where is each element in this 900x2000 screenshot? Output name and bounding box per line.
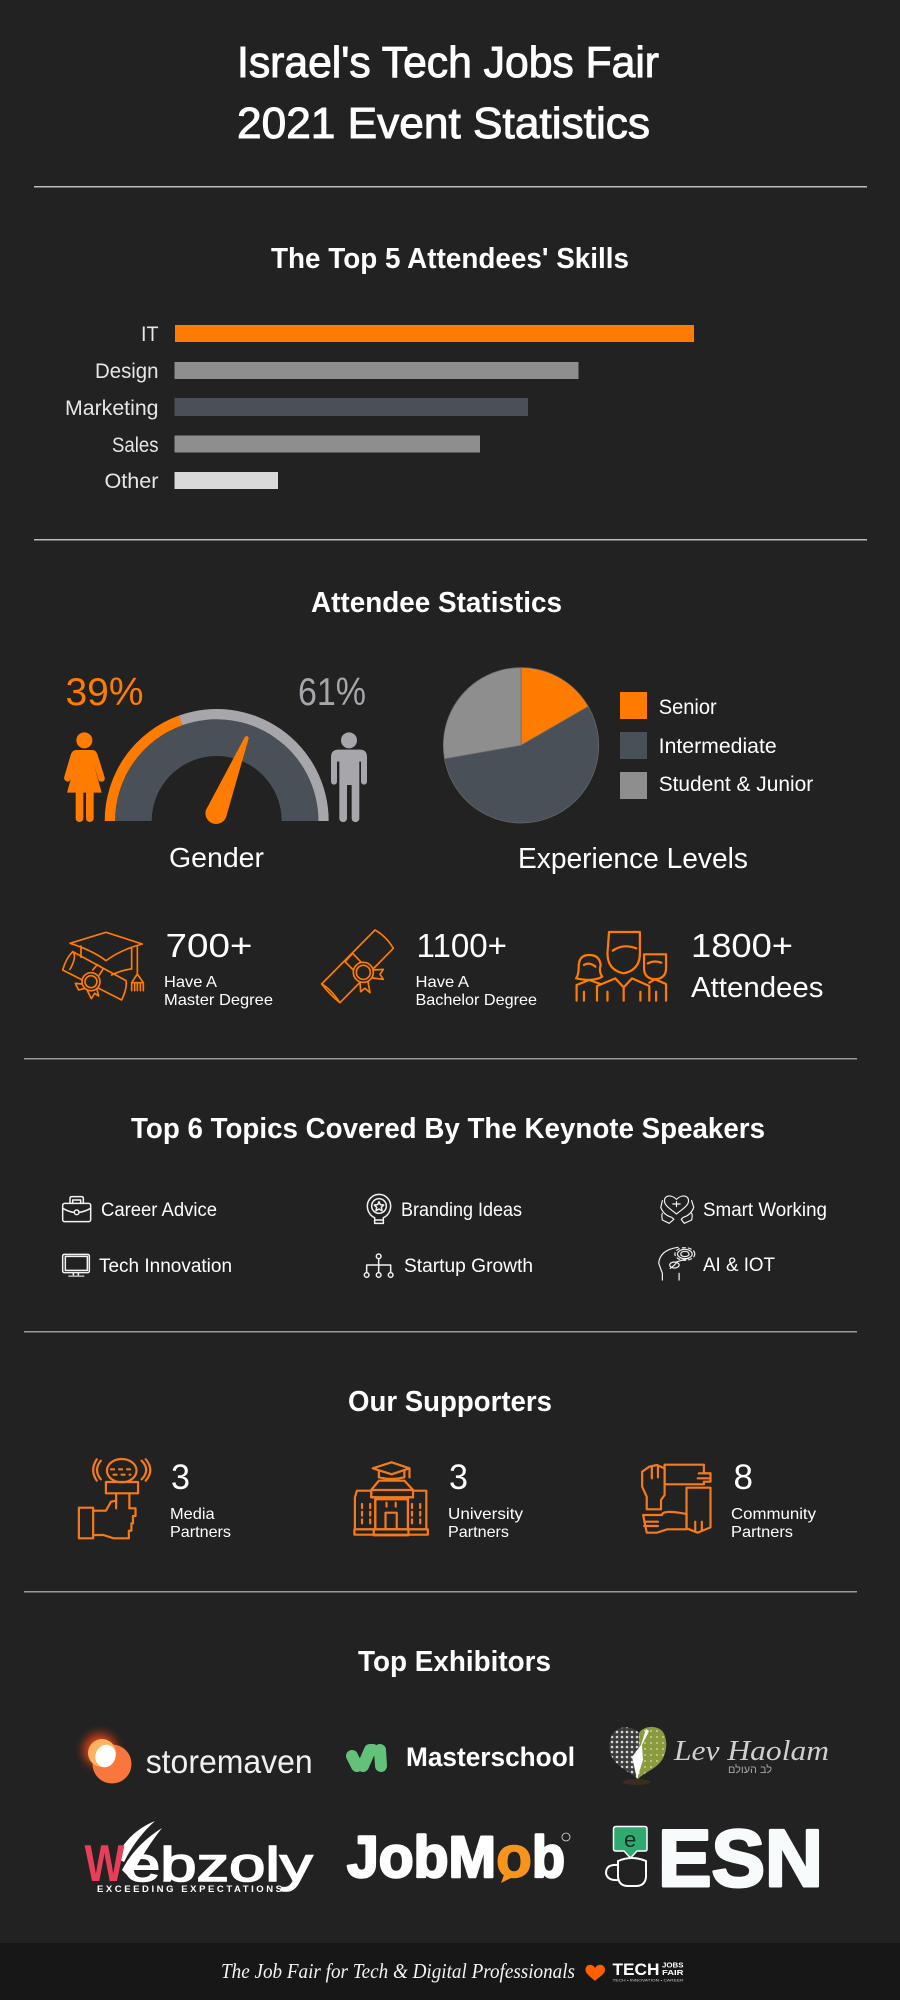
logo: tech jobs fair: JOBS [662,1960,684,1970]
supporter: university partners [354,1458,523,1541]
label: bachelor degree: Have A [416,974,469,991]
bar chart: skills: Other [104,470,158,493]
logo: esn: ESN [658,1814,823,1904]
value and label: university: 3 [449,1458,468,1497]
topic: career advice: Career Advice [101,1200,217,1221]
icon: diploma [322,930,393,1003]
value: 1100+: 1100+ [416,927,507,964]
logo: webzoly: ebzoly [124,1839,312,1892]
logo: lev haolam: לב העולם [728,1763,772,1776]
icon: monitor [63,1254,89,1277]
icon: hands holding heart [661,1196,694,1223]
topic: AI and IOT [659,1247,775,1280]
value and label: media [170,1458,231,1541]
bar chart: skills [65,323,694,493]
title [237,38,659,148]
gender label: Gender [169,842,264,873]
logo: webzoly: W [84,1835,125,1893]
heading: exhibitors: Top Exhibitors [358,1646,551,1678]
value and label: media: Media [170,1506,215,1523]
panel: supporters [79,1386,816,1541]
icon: heart [586,1965,605,1981]
bar chart: skills: Marketing [65,397,158,420]
stat: attendees [576,927,824,1004]
logo: masterschool: Masterschool [406,1742,575,1772]
icon: robot head with gear [659,1247,695,1280]
icon: university building [354,1462,428,1535]
gauge ring [105,709,329,821]
logo: storemaven: storemaven [146,1743,313,1780]
footer tagline: The Job Fair for Tech & Digital Professionals [221,1959,575,1983]
logo: jobmob: JobM [347,1825,496,1890]
pie [443,668,599,823]
icon: graduation cap and scroll [63,932,143,1000]
logo: jobmob: b [532,1825,565,1890]
heading: skills: The Top 5 Attendees' Skills [271,243,629,275]
logo: tech jobs fair [612,1960,684,1982]
experience levels pie chart [443,668,813,875]
stat: bachelor degree [322,927,537,1009]
label: master degree: Have A [164,974,217,991]
topic: startup growth: Startup Growth [404,1256,533,1277]
label: bachelor degree: Bachelor Degree [416,992,537,1009]
icon: people group [576,932,666,1001]
topic: career advice [63,1197,217,1222]
footer bar [0,1943,900,2000]
value and label: community: 8 [734,1458,753,1497]
heading: attendee statistics: Attendee Statistics [311,587,562,619]
logo: webzoly: EXCEEDING EXPECTATIONS [97,1884,282,1895]
icon: hand holding microphone [79,1459,150,1538]
icon: woman [64,732,105,822]
legend: Senior [659,696,717,719]
bar chart: skills: IT [141,323,159,346]
stat: master degree [63,927,273,1009]
value and label: media: 3 [171,1458,190,1497]
value and label: community [731,1458,816,1541]
logo: jobmob: o [496,1825,532,1890]
bar chart: skills: Design [95,360,158,383]
topic: startup growth [364,1254,533,1277]
topic: branding ideas: Branding Ideas [401,1200,522,1221]
logo: tech jobs fair: TECH • INNOVATION • CAREER [612,1978,684,1982]
topic: smart working: Smart Working [703,1200,827,1221]
value and label: media: Partners [170,1524,231,1541]
topic: branding ideas [367,1194,522,1223]
topic: AI and IOT: AI & IOT [703,1255,775,1276]
logo: tech jobs fair: TECH [612,1960,660,1979]
heading: topics: Top 6 Topics Covered By The Keynote Speakers [131,1113,765,1145]
label: attendees: Attendees [691,972,824,1004]
icon: four interlocked hands [642,1465,711,1533]
panel: attendee statistics [63,587,823,1009]
value and label: university: University [448,1506,523,1523]
icon: org chart [364,1254,393,1277]
supporter: media partners [79,1458,231,1541]
logo: lev haolam [609,1727,829,1785]
logo: tech jobs fair: FAIR [662,1968,684,1977]
heading: supporters: Our Supporters [348,1386,552,1418]
label: master degree: Master Degree [164,992,273,1009]
icon: briefcase [63,1197,91,1222]
gender gauge [64,671,367,873]
legend [620,692,813,799]
logo: webzoly [84,1821,312,1895]
value and label: community: Partners [731,1524,793,1541]
value and label: university [448,1458,523,1541]
logo: lev haolam: Lev Haolam [673,1736,829,1767]
panel: keynote topics [63,1113,827,1280]
legend: Student & Junior [659,773,813,796]
icon: light bulb with star [367,1194,391,1223]
value: 1800+: 1800+ [691,927,793,964]
female percentage: 39% [66,671,144,714]
value: 700+: 700+ [166,927,252,964]
label: master degree [164,974,273,1009]
title: Israel's Tech Jobs Fair [237,38,659,87]
male percentage: 61% [298,671,366,714]
experience levels label: Experience Levels [518,843,748,875]
legend: Intermediate [659,735,777,758]
gauge needle [205,736,249,824]
topic: tech innovation: Tech Innovation [99,1256,232,1277]
title: 2021 Event Statistics [237,99,650,148]
supporter: community partners [642,1458,816,1541]
icon: man [331,732,367,822]
panel: top 5 skills [65,243,694,493]
logo: jobmob [347,1825,570,1890]
value and label: community: Community [731,1506,816,1523]
value and label: university: Partners [448,1524,509,1541]
panel: top exhibitors [84,1646,829,1904]
topic: smart working [661,1196,827,1223]
logo: storemaven [84,1734,313,1784]
bar chart: skills: Sales [112,434,158,457]
logo: esn: e [624,1827,636,1852]
label: bachelor degree [416,974,537,1009]
